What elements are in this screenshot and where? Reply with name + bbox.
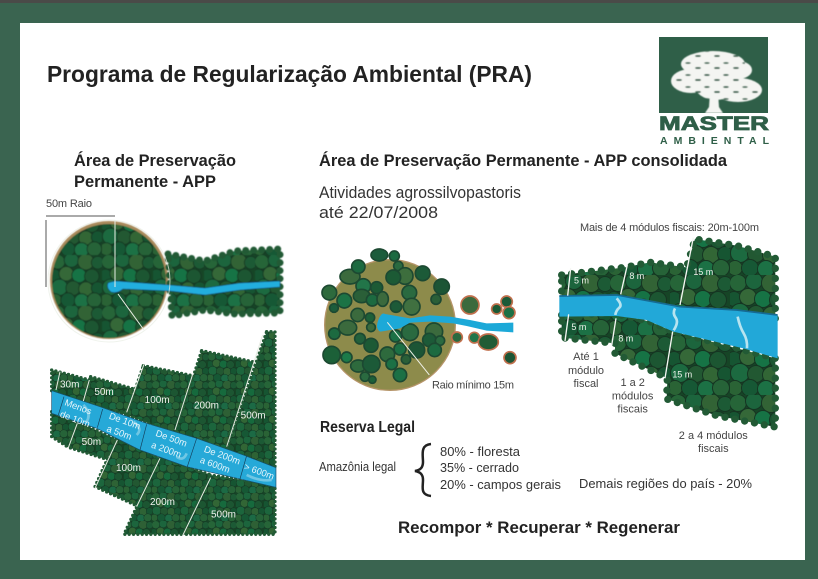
label: 50m raio: 50m Raio	[46, 198, 92, 210]
heading: APP	[74, 151, 236, 191]
label: 2 a 4 módulos	[679, 430, 748, 455]
diagram: consolidated APP by fiscal modules	[559, 222, 778, 455]
icon: white tree	[671, 51, 762, 113]
labels on river: De 10m	[108, 411, 142, 431]
river	[377, 313, 513, 332]
upper forest	[562, 239, 775, 325]
divider lines	[56, 335, 263, 536]
labels on forest: 50m	[94, 387, 114, 398]
labels on forest	[571, 267, 713, 380]
scattered trees	[322, 249, 449, 383]
river highlights	[83, 405, 272, 480]
labels on forest: 500m	[211, 509, 236, 520]
title: Programa de Regularização Ambiental (PRA)	[47, 61, 532, 87]
labels on river: a 50m	[105, 423, 133, 442]
label: 1 a 2 módulos: módulos	[612, 390, 654, 402]
label: 1 a 2 módulos: fiscais	[617, 404, 648, 416]
lower forest	[562, 313, 775, 427]
river	[107, 281, 280, 295]
forest blocks	[52, 332, 275, 534]
slogan: Recompor * Recuperar * Regenerar	[398, 519, 681, 537]
subheading: atividades: até 22/07/2008	[319, 204, 438, 222]
labels on forest: 50m	[82, 437, 101, 448]
labels on river: > 600m	[243, 461, 276, 482]
labels on river: de 10m	[59, 409, 92, 429]
heading: reserva legal: Reserva Legal	[320, 419, 415, 436]
labels on forest	[60, 380, 266, 520]
list: percentages	[440, 444, 561, 492]
list: percentages: 80% - floresta	[440, 444, 521, 459]
heading: APP: Área de Preservação	[74, 151, 236, 170]
labels on river: Menos	[63, 397, 93, 417]
logo: Master Ambiental	[659, 37, 770, 147]
diagram: consolidated APP 15m radius	[322, 249, 516, 391]
labels on river	[59, 397, 276, 482]
subheading: atividades: Atividades agrossilvopastoris	[319, 184, 521, 202]
logo wordmark: AMBIENTAL	[660, 135, 770, 147]
label: 2 a 4 módulos: 2 a 4 módulos	[679, 430, 748, 442]
diagram: APP 50m radius circle	[46, 198, 280, 342]
labels on river: a 600m	[199, 455, 232, 475]
label: até 1 módulo	[568, 351, 604, 390]
labels on forest: 100m	[116, 463, 141, 474]
logo wordmark: MASTER	[659, 114, 769, 135]
label: mais de 4 módulos: Mais de 4 módulos fiscais: 20m-100m	[580, 222, 759, 234]
label: raio mínimo: Raio mínimo 15m	[432, 379, 514, 391]
list: percentages: 35% - cerrado	[440, 460, 519, 475]
labels on forest: 200m	[194, 400, 219, 411]
trees outside circle	[452, 296, 516, 364]
label: 1 a 2 módulos	[612, 377, 654, 416]
labels on forest: 500m	[241, 410, 266, 421]
labels on river: De 50m	[154, 428, 189, 449]
logo wordmark	[659, 114, 770, 147]
labels on forest: 30m	[60, 380, 79, 391]
heading: APP: Permanente - APP	[74, 172, 216, 191]
labels on forest: 100m	[145, 395, 170, 406]
labels on river: De 200m	[203, 444, 242, 467]
heading: APP consolidada: Área de Preservação Permanente - APP consolidada	[319, 151, 728, 170]
rapids	[615, 298, 747, 348]
labels on forest: 15 m	[693, 267, 713, 277]
brace	[415, 444, 431, 496]
labels on forest: 200m	[150, 497, 175, 508]
radius lines	[48, 220, 170, 342]
river	[52, 391, 276, 487]
radius line	[387, 322, 429, 375]
river	[559, 295, 778, 358]
label: 1 a 2 módulos: 1 a 2	[620, 377, 645, 389]
labels on forest: 5 m	[571, 322, 586, 332]
diagram: APP widths by river width	[52, 332, 276, 536]
text: demais regiões: Demais regiões do país - 20%	[579, 476, 752, 491]
labels on forest: 8 m	[629, 271, 644, 281]
label: até 1 módulo: módulo	[568, 365, 604, 377]
label: 2 a 4 módulos: fiscais	[698, 443, 729, 455]
list: percentages: 20% - campos gerais	[440, 477, 561, 492]
labels on forest: 15 m	[672, 370, 692, 380]
label: até 1 módulo: fiscal	[573, 378, 599, 390]
subheading: atividades	[319, 184, 521, 222]
labels on forest: 8 m	[618, 334, 633, 344]
arrows	[565, 238, 693, 378]
labels on river: a 200m	[150, 440, 183, 460]
text: Amazônia legal: Amazônia legal	[319, 460, 396, 474]
dimension lines	[46, 216, 115, 287]
labels on forest: 5 m	[574, 275, 589, 285]
label: até 1 módulo: Até 1	[573, 351, 599, 363]
